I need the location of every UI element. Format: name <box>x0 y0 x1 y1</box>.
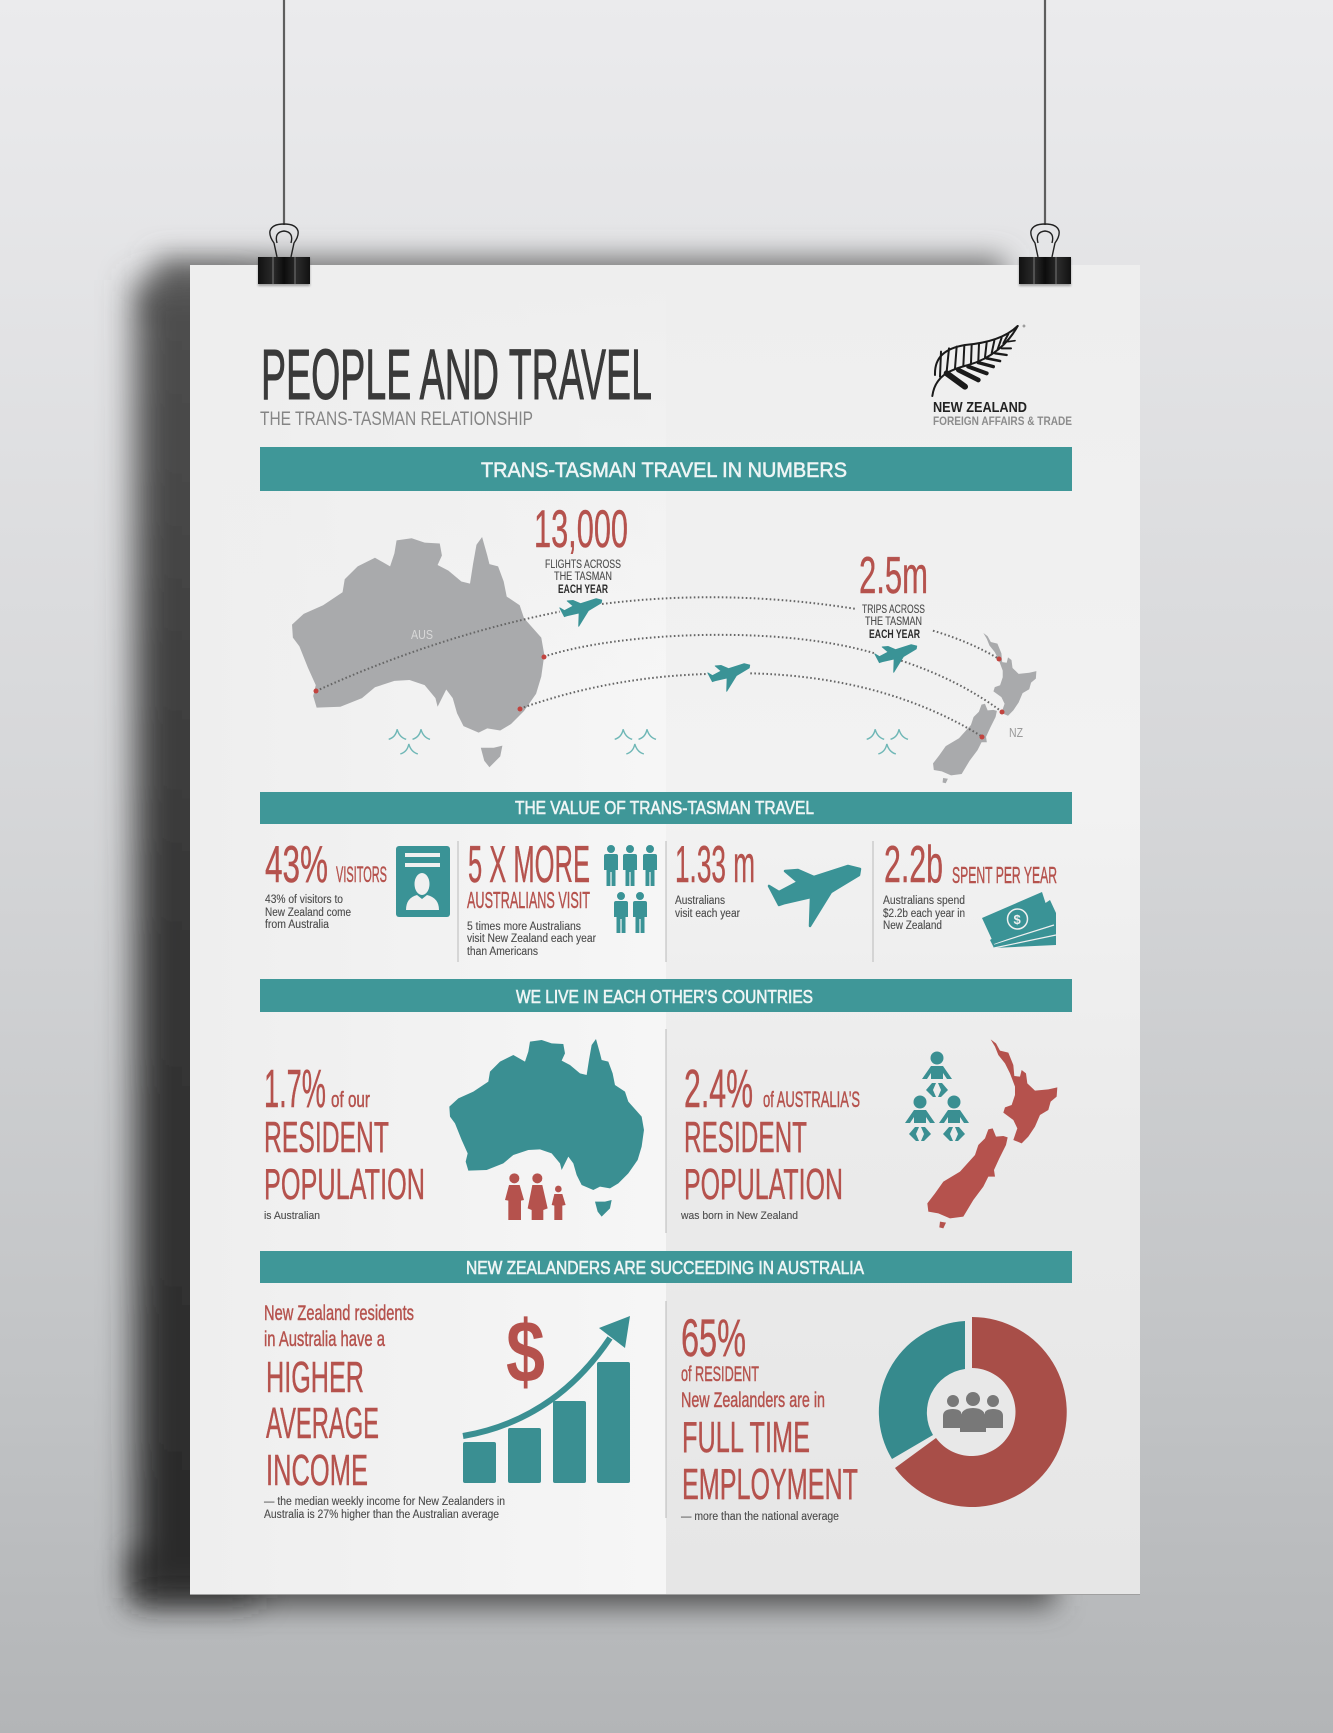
poster shadow <box>130 258 1055 1606</box>
panel: 2.2b spent: SPENT PER YEAR <box>952 862 1057 888</box>
map: Australia and New Zealand: NZ <box>1009 725 1023 740</box>
panel: full time employment: EMPLOYMENT <box>682 1460 858 1509</box>
panel: higher average income: New Zealand residents <box>264 1302 414 1325</box>
panel: 2.4% New Zealand born: POPULATION <box>684 1160 843 1209</box>
panel: 2.2b spent <box>883 836 1057 948</box>
icon: plane 3 <box>708 664 750 691</box>
panel: 1.7% Australian <box>264 1039 644 1222</box>
divider <box>665 1301 667 1518</box>
map: New Zealand red <box>927 1039 1057 1228</box>
panel: 2.4% New Zealand born <box>680 1039 1057 1228</box>
panel: 2.2b spent: $2.2b each year in <box>883 908 965 920</box>
banner: succeeding in Australia <box>260 1251 1072 1283</box>
panel: 43% visitors <box>265 836 450 931</box>
panel: full time employment: New Zealanders are in <box>681 1389 825 1412</box>
panel: 5 X more: AUSTRALIANS VISIT <box>467 887 590 913</box>
map: Australia <box>292 537 544 767</box>
stat: 13,000 flights: EACH YEAR <box>558 584 609 596</box>
banner: value of travel: THE VALUE OF TRANS-TASMAN TRAVEL <box>515 798 814 818</box>
stat: 13,000 flights: 13,000 <box>534 500 628 559</box>
icon: people <box>604 845 657 933</box>
icon: rising arrow <box>463 1316 630 1436</box>
map: New Zealand <box>933 633 1036 783</box>
panel: full time employment: FULL TIME <box>682 1413 810 1462</box>
panel: 2.4% New Zealand born: was born in New Zealand <box>680 1210 798 1222</box>
banner: travel in numbers <box>260 447 1072 491</box>
banner: travel in numbers: TRANS-TASMAN TRAVEL IN NUMBERS <box>481 458 847 482</box>
icon: waves 3 <box>867 729 908 754</box>
panel: higher average income: INCOME <box>266 1446 368 1495</box>
banner: each other's countries: WE LIVE IN EACH OTHER'S COUNTRIES <box>516 987 813 1007</box>
panel: full time employment <box>681 1309 1067 1523</box>
panel: 43% visitors: from Australia <box>265 919 330 931</box>
banner: each other's countries <box>260 979 1072 1012</box>
panel: 1.33 m: visit each year <box>675 908 740 920</box>
panel: 43% visitors: New Zealand come <box>265 907 351 919</box>
panel: 2.4% New Zealand born: of AUSTRALIA'S <box>763 1087 860 1112</box>
panel: 43% visitors: 43% of visitors to <box>265 894 343 906</box>
title <box>260 336 652 430</box>
icon: money: $ <box>1014 912 1022 927</box>
stat: 13,000 flights: THE TASMAN <box>554 571 612 583</box>
poster sheet <box>190 265 1140 1595</box>
panel: higher average income: in Australia have a <box>264 1328 385 1351</box>
city markers <box>314 654 1004 740</box>
icon: dollar: $ <box>506 1302 545 1401</box>
panel: 1.33 m: 1.33 m <box>675 836 755 894</box>
icon: plane 1 <box>560 599 602 626</box>
title: PEOPLE AND TRAVEL <box>261 336 652 415</box>
panel: 1.7% Australian: RESIDENT <box>264 1113 389 1162</box>
panel: higher average income: HIGHER <box>266 1353 364 1402</box>
panel: 1.7% Australian: POPULATION <box>264 1160 425 1209</box>
stat: 2.5m trips: EACH YEAR <box>869 629 921 641</box>
panel: 5 X more: than Americans <box>467 946 538 958</box>
panel: full time employment: — more than the national average <box>681 1511 839 1523</box>
icon: plane 2 <box>875 645 917 672</box>
hanging strings and binder clips <box>258 0 1071 286</box>
panel: higher average income: AVERAGE <box>266 1399 379 1448</box>
panel: higher average income: Australia is 27% higher than the Australian average <box>264 1509 499 1521</box>
flight paths <box>316 597 1002 737</box>
icon: babies <box>905 1052 969 1141</box>
panel: 1.7% Australian: of our <box>331 1087 370 1112</box>
divider <box>665 841 667 962</box>
panel: 2.4% New Zealand born: RESIDENT <box>684 1113 807 1162</box>
panel: 2.2b spent: New Zealand <box>883 920 942 932</box>
panel: 2.2b spent: 2.2b <box>884 836 943 894</box>
map: Australia and New Zealand: AUS <box>411 627 433 642</box>
icon: waves 1 <box>389 729 430 754</box>
banner: succeeding in Australia: NEW ZEALANDERS ARE SUCCEEDING IN AUSTRALIA <box>466 1258 864 1278</box>
stat: 2.5m trips: TRIPS ACROSS <box>862 604 925 616</box>
panel: 5 X more: 5 X MORE <box>468 836 590 894</box>
icon: fern <box>932 325 1025 396</box>
panel: 5 X more: 5 times more Australians <box>467 921 581 933</box>
icon: group of people <box>943 1392 1003 1432</box>
icon: ID card <box>396 846 450 917</box>
map: Australia teal <box>449 1039 644 1217</box>
panel: 1.7% Australian: 1.7% <box>264 1059 326 1119</box>
panel: full time employment: 65% <box>681 1309 746 1368</box>
panel: 5 X more: visit New Zealand each year <box>467 933 596 945</box>
panel: 5 X more <box>467 836 657 958</box>
panel: higher average income: — the median weekly income for New Zealanders in <box>264 1496 505 1508</box>
icon: family <box>505 1173 566 1220</box>
stat: 2.5m trips: 2.5m <box>859 547 928 605</box>
panel: higher average income <box>264 1302 630 1521</box>
panel: 1.33 m: Australians <box>675 895 725 907</box>
panel: full time employment: of RESIDENT <box>681 1363 759 1386</box>
bar chart <box>463 1362 630 1483</box>
panel: 2.4% New Zealand born: 2.4% <box>684 1059 753 1119</box>
divider <box>665 1029 667 1233</box>
map: Australia and New Zealand <box>292 537 1036 783</box>
stat: 13,000 flights: FLIGHTS ACROSS <box>545 559 621 571</box>
donut chart <box>879 1317 1067 1507</box>
stat: 2.5m trips: THE TASMAN <box>865 616 922 628</box>
icon: waves 2 <box>615 729 656 754</box>
left clip <box>258 0 310 286</box>
title: THE TRANS-TASMAN RELATIONSHIP <box>260 409 533 430</box>
logo: New Zealand fern <box>932 325 1072 428</box>
logo: New Zealand fern: NEW ZEALAND <box>933 400 1027 416</box>
panel: 1.7% Australian: is Australian <box>264 1210 320 1222</box>
icon: money <box>982 892 1056 948</box>
icon: plane <box>769 866 860 926</box>
panel: 43% visitors: VISITORS <box>336 862 387 887</box>
logo: New Zealand fern: FOREIGN AFFAIRS & TRADE <box>933 414 1072 428</box>
banner: value of travel <box>260 792 1072 824</box>
stat: 13,000 flights <box>534 500 628 596</box>
panel: 2.2b spent: Australians spend <box>883 895 965 907</box>
panel: 1.33 m <box>675 836 860 926</box>
stat: 2.5m trips <box>859 547 928 641</box>
divider <box>872 841 874 962</box>
divider <box>457 841 459 962</box>
panel: 43% visitors: 43% <box>265 836 328 894</box>
right clip <box>1019 0 1071 286</box>
